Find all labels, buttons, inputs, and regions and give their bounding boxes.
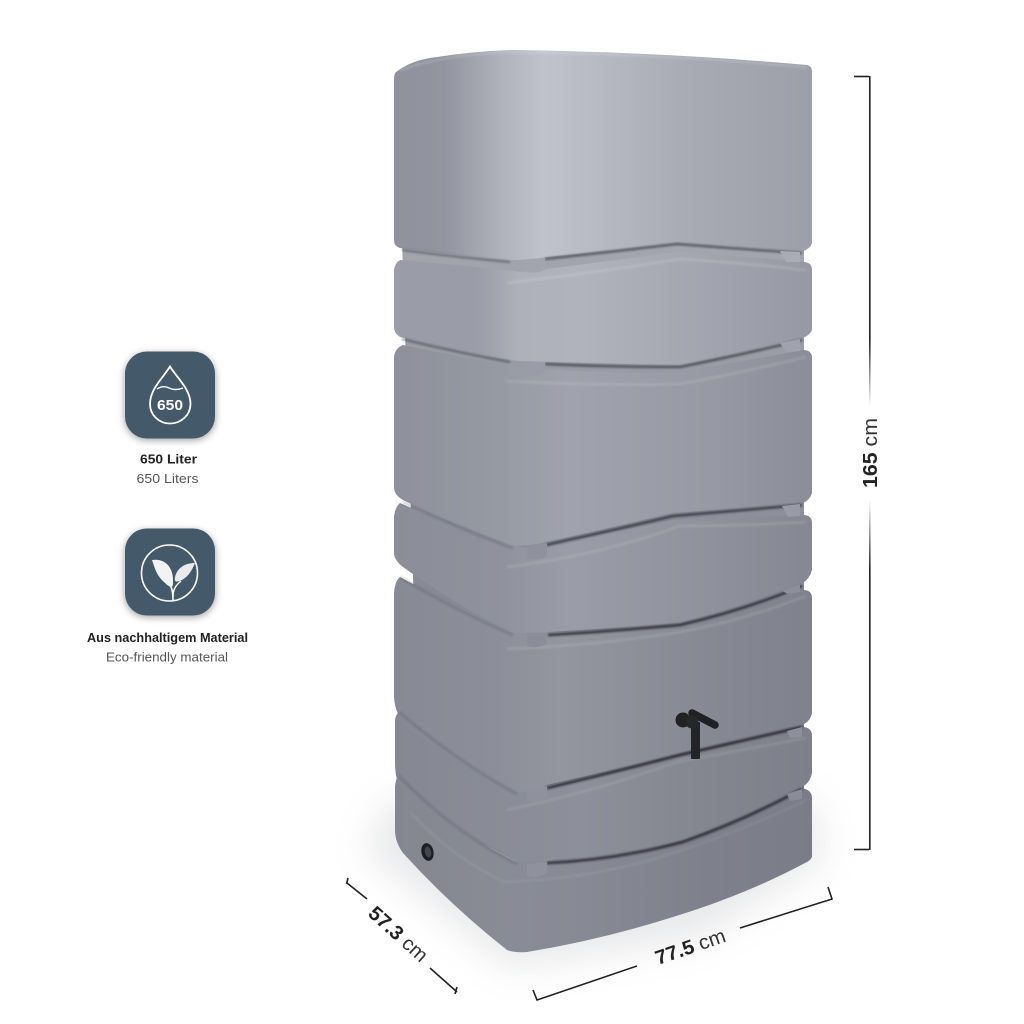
tank segment 1: top: [394, 50, 812, 262]
tank back column: [402, 240, 804, 850]
connecting pegs: [527, 251, 802, 877]
label: Eco-friendly material: Eco-friendly material: [106, 650, 228, 664]
feature: eco-friendly material: [87, 528, 248, 664]
rain tank: [394, 50, 812, 952]
tank segment 4: [394, 503, 812, 635]
icon: water drop badge: 650: [157, 397, 183, 414]
height dimension: 165 cm: 165 cm: [860, 418, 882, 488]
water tap: [676, 712, 715, 759]
label: 650 Liter: 650 Liter: [140, 452, 197, 466]
label: 650 Liters: 650 Liters: [136, 471, 199, 486]
tank segment 2: [394, 252, 812, 367]
tank segment 7: base: [395, 775, 812, 952]
icon: leaf badge: [125, 528, 215, 617]
tank segment 6: [395, 712, 812, 864]
width dimension: 77.5 cm: [533, 887, 832, 1000]
width dimension: 77.5 cm: 77.5 cm: [652, 925, 729, 970]
feature: 650 liters: [125, 352, 215, 486]
tank segment 3: [394, 345, 812, 548]
depth dimension: 57.3 cm: 57.3 cm: [364, 902, 432, 967]
tank segment 5: [394, 577, 812, 794]
inlet port: [420, 842, 435, 862]
depth dimension: 57.3 cm: [346, 878, 457, 994]
label: Aus nachhaltigem Material: Aus nachhaltigem Material: [87, 630, 248, 645]
ground shadow: [365, 800, 825, 968]
